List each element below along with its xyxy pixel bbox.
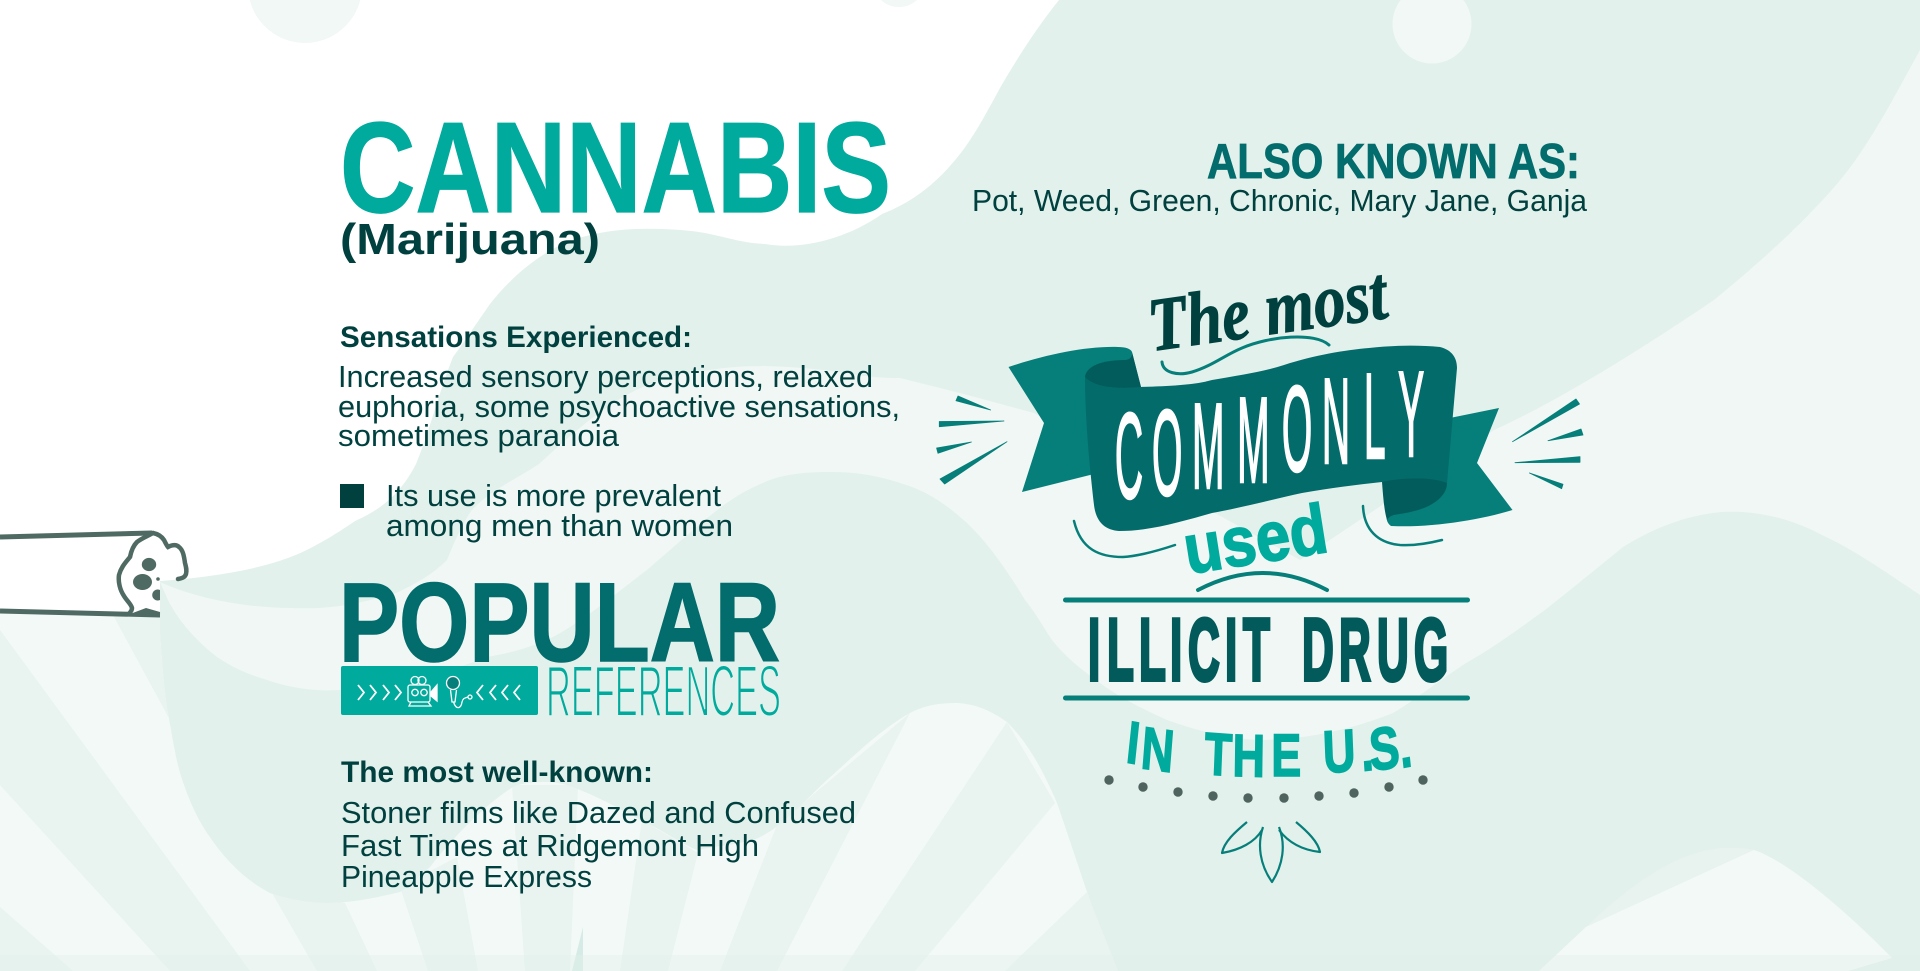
swash lower right of ribbon (1363, 506, 1442, 545)
lettering: used: used (1178, 489, 1333, 589)
ribbon main band (1085, 346, 1457, 531)
text: alternative names: Pot, Weed, Green, Chronic, Mary Jane, Ganja (972, 183, 1588, 218)
text block: sensations experienced: Sensations Experienced: (340, 321, 692, 354)
bullet point: prevalence among men: among men than women (386, 508, 733, 543)
subtitle: Marijuana: (Marijuana) (340, 215, 600, 264)
background: light leaf lower right (1539, 850, 1892, 971)
rule below Illicit Drug (1063, 696, 1470, 700)
text block: the most well-known: Stoner films like Dazed and Confused (341, 795, 856, 830)
text block: sensations experienced: sometimes paranoia (338, 418, 620, 453)
infographic canvas: REFERENCES (546, 652, 781, 732)
rule above Illicit Drug (1063, 598, 1470, 602)
background: white top-left area (0, 0, 1059, 616)
heading: also known as: ALSO KNOWN AS: (1207, 135, 1580, 189)
arc under used (1198, 573, 1327, 590)
lettering: Commonly: COMMONLY (1115, 347, 1424, 525)
text block: the most well-known: Pineapple Express (341, 859, 592, 894)
ribbon left tail (1008, 347, 1141, 492)
lettering: In the U.S.: IN THE U.S. (1124, 709, 1415, 790)
swash under The most (1162, 337, 1329, 374)
background: bottom band (0, 955, 1920, 971)
background: leaf rays lower left (0, 611, 1118, 971)
text block: sensations experienced: euphoria, some psychoactive sensations, (338, 389, 900, 424)
icon: cannabis leaf outline (1222, 822, 1320, 882)
bullet point: prevalence among men (340, 478, 733, 543)
background: light wave band (160, 50, 1920, 740)
text block: sensations experienced (338, 321, 900, 453)
background: circle top middle (872, 0, 926, 7)
icon: right chevrons (358, 685, 401, 700)
background: circle top left (248, 0, 362, 43)
banner ribbon (1008, 346, 1512, 531)
text block: sensations experienced: Increased sensory perceptions, relaxed (338, 359, 873, 394)
background: circle top right (1392, 0, 1472, 64)
icon: left chevrons (477, 685, 520, 700)
bullet point: prevalence among men: Its use is more prevalent (386, 478, 721, 513)
icon: joint with burning tip (0, 533, 187, 617)
title: Cannabis: CANNABIS (340, 96, 891, 240)
background: small spike (572, 927, 583, 971)
lettering: The most: The most (1143, 251, 1394, 368)
burst lines left (937, 396, 1007, 484)
text block: the most well-known (341, 756, 856, 894)
burst lines right (1512, 399, 1583, 489)
dotted arc (1104, 775, 1428, 803)
ribbon right fold (1382, 478, 1447, 520)
text block: the most well-known: The most well-known: (341, 756, 653, 789)
background: darker ray stripes (0, 615, 1118, 971)
ribbon right tail (1387, 408, 1512, 526)
swash lower left of ribbon (1074, 521, 1175, 557)
heading band: icons on teal box (341, 666, 538, 715)
icon: microphone (446, 676, 472, 708)
background: faint leaf edge lower right (1539, 848, 1754, 971)
ribbon left fold (1085, 352, 1141, 388)
heading: Popular: POPULAR (339, 560, 780, 685)
text block: the most well-known: Fast Times at Ridgemont High (341, 828, 759, 863)
lettering: Illicit Drug: ILLICIT DRUG (1088, 600, 1448, 699)
icon: film camera (408, 676, 437, 706)
